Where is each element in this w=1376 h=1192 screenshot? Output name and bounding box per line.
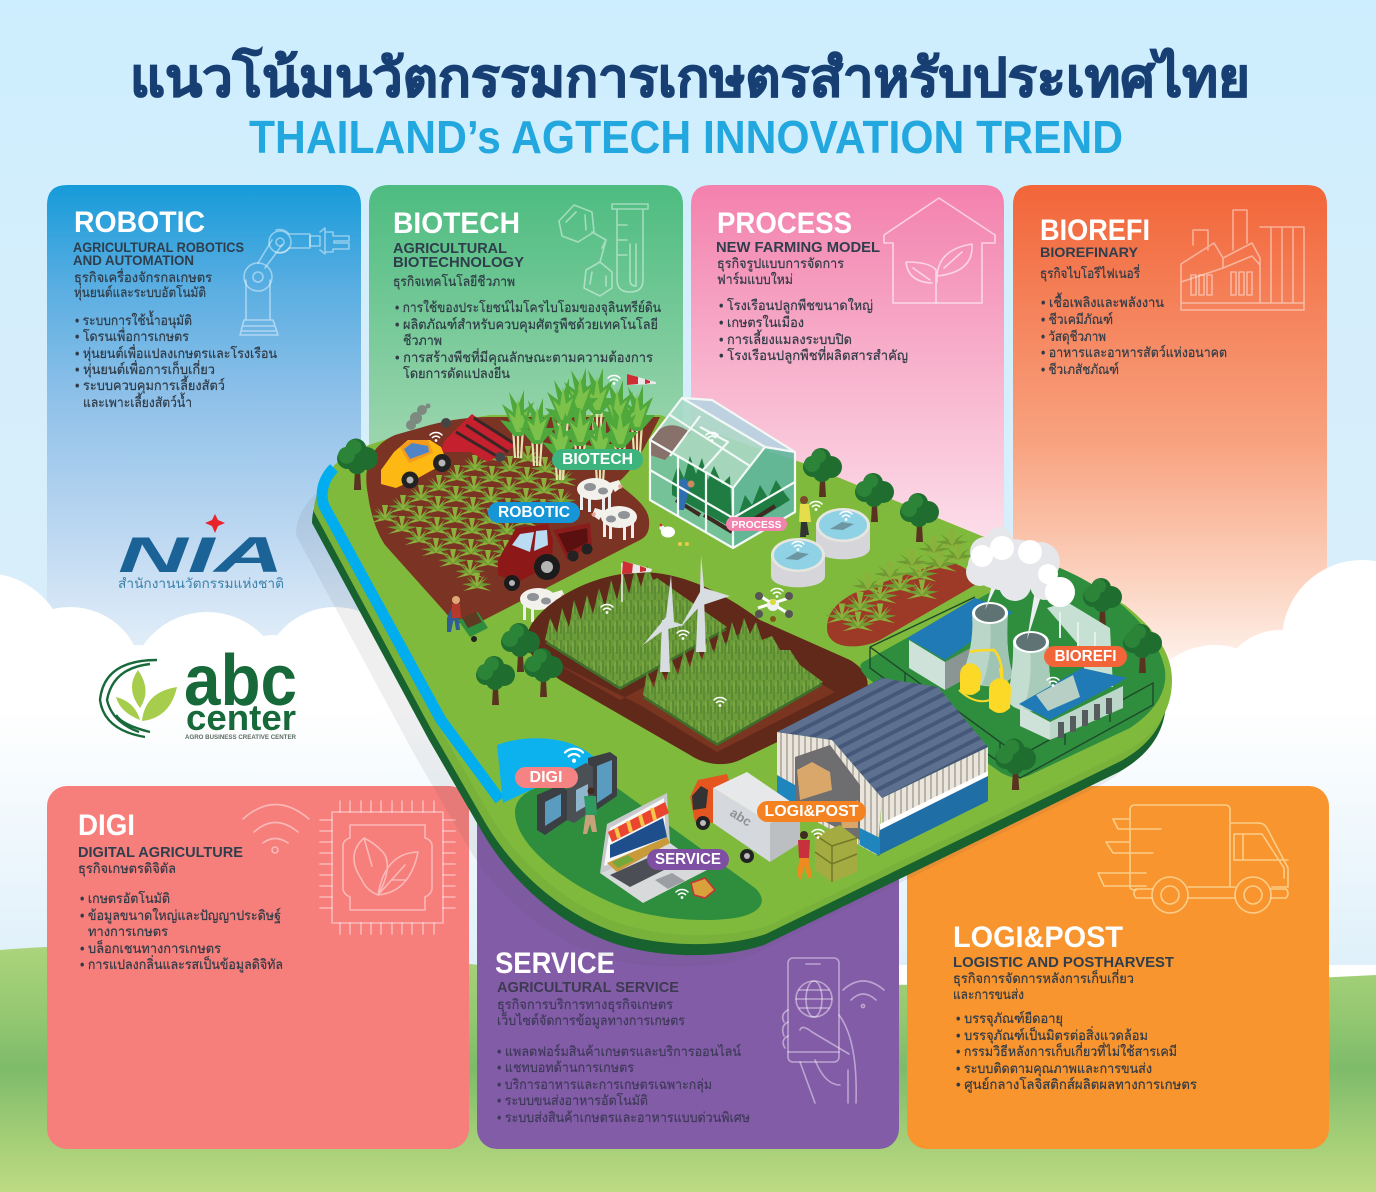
harrow bbox=[440, 414, 515, 462]
label: biorefi: BIOREFI bbox=[1054, 648, 1116, 665]
wind turbines bbox=[643, 555, 730, 672]
panel: robotic text bbox=[73, 206, 349, 410]
label: service bbox=[647, 849, 729, 870]
service bullet list: • ระบบส่งสินค้าเกษตรและอาหารแบบด่วนพิเศษ bbox=[497, 1110, 750, 1125]
label: logi and post bbox=[757, 801, 866, 822]
biotech bullet list: • ผลิตภัณฑ์สำหรับควบคุมศัตรูพืชด้วยเทคโนโลยี bbox=[395, 316, 658, 333]
logi bullet list: • ศูนย์กลางโลจิสติกส์ผลิตผลทางการเกษตร bbox=[956, 1076, 1197, 1093]
farm island illustration bbox=[296, 368, 1172, 967]
process bullet list bbox=[719, 297, 908, 364]
foreground tree bbox=[995, 739, 1036, 790]
service heading: SERVICE bbox=[495, 947, 615, 980]
robotic bullet list: • โดรนเพื่อการเกษตร bbox=[75, 327, 189, 344]
digi bullet list: • การแปลงกลิ่นและรสเป็นข้อมูลดิจิทัล bbox=[80, 955, 283, 973]
greenhouse bbox=[650, 398, 795, 548]
biorefinery pad bbox=[860, 565, 1165, 778]
logi bullet list bbox=[956, 1010, 1197, 1093]
smoke stacks ducts bbox=[1047, 602, 1113, 687]
server racks bbox=[537, 752, 617, 835]
biorefi bullet list: • อาหารและอาหารสัตว์แห่งอนาคต bbox=[1041, 344, 1227, 360]
icon: robot arm bbox=[240, 228, 349, 335]
steam cloud bbox=[966, 527, 1075, 640]
digi heading: DIGI bbox=[78, 809, 135, 842]
title bbox=[130, 47, 1250, 163]
biorefi heading: BIOREFI bbox=[1040, 214, 1150, 247]
yellow tractor and harrow bbox=[381, 404, 515, 488]
digi bullet list: • ข้อมูลขนาดใหญ่และปัญญาประดิษฐ์ bbox=[80, 907, 281, 924]
panel: biorefi text bbox=[1040, 210, 1304, 377]
robotic subheading: AND AUTOMATION bbox=[73, 252, 194, 268]
biorefinery fence bbox=[870, 597, 1153, 778]
biotech subheading: BIOTECHNOLOGY bbox=[393, 254, 524, 271]
label: biotech: BIOTECH bbox=[562, 451, 633, 468]
biotech description: ธุรกิจเทคโนโลยีชีวภาพ bbox=[393, 273, 515, 290]
biorefi bullet list: • วัสดุชีวภาพ bbox=[1041, 329, 1106, 345]
biorefi bullet list: • เชื้อเพลิงและพลังงาน bbox=[1041, 292, 1164, 310]
cows bbox=[520, 478, 637, 622]
service description bbox=[497, 997, 685, 1029]
icon: phone in hand bbox=[783, 958, 856, 1103]
biotech subheading bbox=[393, 240, 524, 271]
process bullet list: • โรงเรือนปลูกพืชขนาดใหญ่ bbox=[719, 297, 873, 314]
center wordmark: center bbox=[186, 697, 296, 738]
digi bullet list bbox=[80, 890, 283, 973]
biorefi bullet list: • ชีวเคมีภัณฑ์ bbox=[1041, 311, 1113, 327]
icon: red star bbox=[205, 514, 225, 533]
icon: chip with leaves bbox=[320, 801, 455, 934]
worker with pallets bbox=[797, 825, 857, 882]
process bullet list: • การเลี้ยงแมลงระบบปิด bbox=[719, 329, 852, 347]
process subheading: NEW FARMING MODEL bbox=[716, 239, 880, 256]
river bbox=[322, 468, 500, 800]
logi bullet list: • บรรจุภัณฑ์เป็นมิตรต่อสิ่งแวดล้อม bbox=[956, 1026, 1148, 1044]
logi description: ธุรกิจการจัดการหลังการเก็บเกี่ยว bbox=[953, 969, 1134, 987]
logi subheading: LOGISTIC AND POSTHARVEST bbox=[953, 954, 1174, 971]
panel: logi and post bbox=[907, 786, 1329, 1149]
logo: NIA bbox=[118, 514, 284, 591]
process bullet list: • โรงเรือนปลูกพืชที่ผลิตสารสำคัญ bbox=[719, 346, 908, 364]
chicken and chicks bbox=[659, 524, 689, 546]
logi heading: LOGI&POST bbox=[953, 921, 1123, 954]
windsock front bbox=[622, 561, 652, 602]
sugarcane bbox=[500, 368, 655, 482]
digi subheading: DIGITAL AGRICULTURE bbox=[78, 844, 243, 861]
icon: house with sprout bbox=[884, 198, 995, 303]
robotic subheading bbox=[73, 239, 244, 268]
drone bbox=[755, 592, 793, 622]
panel: process background bbox=[691, 185, 1004, 700]
biorefi bullet list: • ชีวเภสัชภัณฑ์ bbox=[1041, 361, 1119, 377]
field: small brown bbox=[826, 530, 975, 646]
field: rice beds bbox=[526, 565, 868, 764]
yellow tanks bbox=[959, 650, 1011, 713]
process description bbox=[717, 256, 844, 287]
digi bullet list: ทางการเกษตร bbox=[88, 924, 168, 939]
building: right blue roof bbox=[1019, 668, 1127, 740]
farmer with wheelbarrow bbox=[447, 596, 488, 642]
windsock back bbox=[627, 374, 656, 385]
service bullet list: • ระบบขนส่งอาหารอัตโนมัติ bbox=[497, 1092, 648, 1108]
icon: test tube and molecule bbox=[559, 204, 648, 296]
biorefi description: ธุรกิจไบโอรีไฟเนอรี่ bbox=[1040, 264, 1140, 282]
wifi signals bbox=[430, 376, 1059, 898]
panel: robotic background bbox=[47, 185, 361, 700]
NIA wordmark: NIA bbox=[118, 527, 284, 583]
service description: ธุรกิจการบริการทางธุรกิจเกษตร bbox=[497, 997, 673, 1013]
label: biotech bbox=[552, 449, 643, 470]
warehouse bbox=[777, 678, 988, 856]
biotech bullet list: โดยการดัดแปลงยีน bbox=[403, 365, 510, 381]
icon: factory bbox=[1181, 210, 1304, 310]
tractor body bbox=[381, 440, 447, 488]
service bullet list: • บริการอาหารและการเกษตรเฉพาะกลุ่ม bbox=[497, 1077, 712, 1093]
person with yellow shirt bbox=[799, 496, 811, 537]
island rim bbox=[314, 424, 1168, 944]
logi description bbox=[953, 969, 1134, 1002]
digi bullet list: • บล็อกเชนทางการเกษตร bbox=[80, 939, 221, 956]
island surface bbox=[318, 415, 1172, 935]
service subheading: AGRICULTURAL SERVICE bbox=[497, 979, 679, 996]
island base bbox=[312, 435, 1166, 955]
service pad bbox=[515, 765, 762, 920]
robotic bullet list: • หุ่นยนต์เพื่อการเก็บเกี่ยว bbox=[75, 360, 215, 378]
logi bullet list: • ระบบติดตามคุณภาพและการขนส่ง bbox=[956, 1061, 1152, 1077]
biorefi subheading: BIOREFINARY bbox=[1040, 244, 1139, 260]
robotic bullet list: • ระบบการใช้น้ำอนุมัติ bbox=[75, 310, 192, 329]
robotic heading: ROBOTIC bbox=[74, 206, 205, 239]
truck bbox=[690, 772, 800, 863]
icon: delivery truck bbox=[1098, 805, 1288, 913]
logi description: และการขนส่ง bbox=[953, 987, 1024, 1002]
service description: เว็บไซต์จัดการข้อมูลทางการเกษตร bbox=[497, 1011, 685, 1029]
biorefi bullet list bbox=[1041, 292, 1227, 377]
process heading: PROCESS bbox=[717, 207, 852, 240]
label: logi and post: LOGI&POST bbox=[764, 803, 859, 820]
icon: leaf and swirl bbox=[100, 660, 177, 737]
plants: large field bbox=[370, 445, 577, 591]
robotic bullet list bbox=[75, 310, 277, 410]
label: digi: DIGI bbox=[530, 769, 562, 786]
digi description: ธุรกิจเกษตรดิจิตัล bbox=[78, 861, 176, 877]
laptop with online shop bbox=[600, 793, 707, 903]
panel: service bbox=[477, 786, 899, 1149]
tagline: AGRO BUSINESS CREATIVE CENTER bbox=[185, 734, 296, 741]
panel: biotech background bbox=[369, 185, 683, 700]
fish tanks bbox=[771, 508, 870, 587]
digi bullet list: • เกษตรอัตโนมัติ bbox=[80, 890, 170, 906]
label: robotic: ROBOTIC bbox=[498, 504, 570, 521]
field: large brown bbox=[366, 417, 660, 624]
service bullet list: • แชทบอทด้านการเกษตร bbox=[497, 1060, 634, 1075]
logi bullet list: • กรรมวิธีหลังการเก็บเกี่ยวที่ไม่ใช้สารเคมี bbox=[956, 1042, 1177, 1059]
biotech bullet list bbox=[395, 299, 661, 381]
label: robotic bbox=[488, 502, 580, 523]
trees bbox=[337, 439, 1162, 705]
red tractor bbox=[498, 523, 592, 591]
robotic description: ธุรกิจเครื่องจักรกลเกษตร bbox=[74, 268, 212, 286]
title: Thai: แนวโน้มนวัตกรรมการเกษตรสำหรับประเทศไทย bbox=[130, 47, 1250, 108]
label: service: SERVICE bbox=[655, 851, 721, 868]
service bullet list: • แพลตฟอร์มสินค้าเกษตรและบริการออนไลน์ bbox=[497, 1043, 741, 1059]
biotech bullet list: • การสร้างพืชที่มีคุณลักษณะตามความต้องการ bbox=[395, 348, 653, 366]
robotic bullet list: และเพาะเลี้ยงสัตว์น้ำ bbox=[83, 392, 192, 410]
service bullet list bbox=[497, 1043, 750, 1125]
process description: ธุรกิจรูปแบบการจัดการ bbox=[717, 256, 844, 272]
panel: process text bbox=[716, 198, 995, 364]
logi bullet list: • บรรจุภัณฑ์ยืดอายุ bbox=[956, 1010, 1063, 1027]
icon: wifi bbox=[243, 804, 309, 853]
biotech subheading: AGRICULTURAL bbox=[393, 240, 507, 257]
label: biorefi bbox=[1044, 646, 1127, 667]
truck logo: abc bbox=[727, 805, 754, 829]
robotic subheading: AGRICULTURAL ROBOTICS bbox=[73, 239, 244, 255]
grass hills bbox=[0, 945, 1376, 1192]
panel: biotech text bbox=[393, 204, 661, 381]
robotic bullet list: • ระบบควบคุมการเลี้ยงสัตว์ bbox=[75, 375, 225, 394]
abc wordmark: abc bbox=[184, 641, 297, 721]
cooling towers bbox=[962, 602, 1055, 711]
process description: ฟาร์มแบบใหม่ bbox=[717, 271, 793, 287]
label: process: PROCESS bbox=[732, 519, 782, 531]
panel: biorefi background bbox=[1013, 185, 1327, 700]
clouds and lower sky bbox=[0, 560, 1376, 965]
pond bbox=[497, 738, 597, 803]
logo: abc center bbox=[100, 641, 297, 741]
label: digi bbox=[515, 767, 578, 788]
background: sky bbox=[0, 0, 1376, 700]
robotic description bbox=[74, 268, 212, 301]
biotech bullet list: ชีวภาพ bbox=[403, 333, 442, 348]
island shadow bbox=[296, 447, 1150, 967]
robotic bullet list: • หุ่นยนต์เพื่อแปลงเกษตรและโรงเรือน bbox=[75, 344, 277, 362]
building: left blue roof bbox=[907, 598, 1013, 690]
robotic description: หุ่นยนต์และระบบอัตโนมัติ bbox=[74, 284, 206, 301]
NIA Thai name: สำนักงานนวัตกรรมแห่งชาติ bbox=[118, 576, 284, 591]
biotech heading: BIOTECH bbox=[393, 207, 520, 240]
title: English: THAILAND’s AGTECH INNOVATION TREND bbox=[249, 111, 1123, 163]
smoke bbox=[406, 404, 430, 430]
icon: wifi bbox=[843, 981, 884, 1008]
biotech bullet list: • การใช้ของประโยชน์ไมโครไบโอมของจุลินทรีย์ดิน bbox=[395, 299, 661, 316]
process bullet list: • เกษตรในเมือง bbox=[719, 314, 804, 330]
basket bbox=[691, 878, 715, 898]
panel: digi bbox=[47, 786, 469, 1149]
